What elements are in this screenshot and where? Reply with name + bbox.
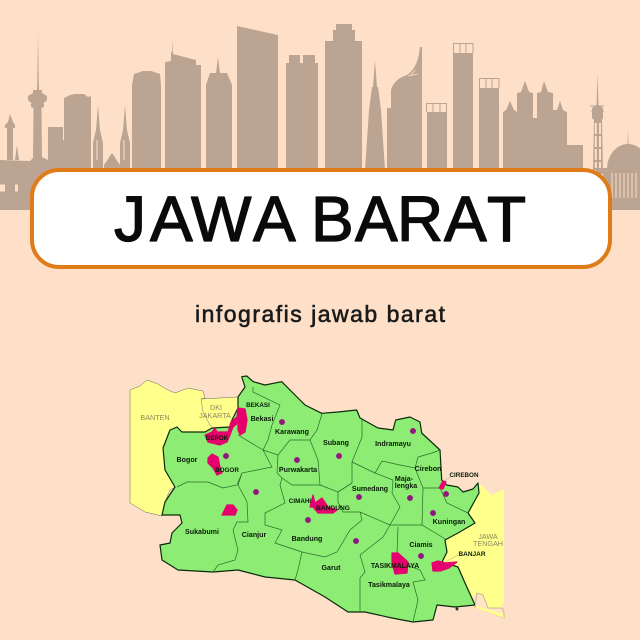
- cities in magenta: [205, 408, 457, 574]
- regency capitals: [223, 419, 449, 559]
- district labels: Karawang: [275, 428, 309, 436]
- grey province labels: JAWA: [478, 532, 498, 541]
- district labels: CIMAHI: [289, 498, 311, 505]
- district labels: TASIKMALAYA: [371, 563, 419, 570]
- neighbouring province: Banten: [130, 380, 238, 516]
- district labels: Bekasi: [251, 415, 273, 423]
- title text: JAWA BARAT: [114, 183, 526, 255]
- district labels: Bandung: [292, 535, 322, 543]
- district boundaries: [177, 387, 468, 622]
- island yellow strip: [476, 606, 504, 618]
- south coast island: [475, 593, 504, 618]
- district labels: Sumedang: [352, 485, 388, 493]
- district labels: Maja-: [395, 475, 414, 483]
- grey province labels: JAKARTA: [199, 411, 231, 420]
- grey province labels: [140, 403, 503, 548]
- label leader lines: [443, 477, 458, 562]
- DKI Jakarta boundary: [201, 399, 212, 428]
- district labels: [177, 402, 486, 589]
- district labels: CIREBON: [449, 472, 479, 479]
- coastal marker: [456, 608, 458, 610]
- district labels: BOGOR: [215, 467, 239, 474]
- district labels: BANDUNG: [316, 505, 350, 512]
- skyline details: [0, 44, 636, 198]
- title banner: [32, 170, 610, 267]
- map of West Java: [130, 376, 504, 622]
- district labels: Indramayu: [375, 440, 411, 448]
- district labels: Cianjur: [242, 531, 266, 539]
- grey province labels: TENGAH: [473, 539, 503, 548]
- district labels: Subang: [323, 439, 349, 447]
- district labels: BEKASI: [246, 402, 270, 409]
- district labels: Purwakarta: [279, 466, 317, 474]
- district labels: Cirebon: [415, 465, 441, 473]
- neighbouring province: Jawa Tengah: [442, 483, 504, 608]
- grey province labels: BANTEN: [140, 413, 170, 422]
- district labels: Kuningan: [433, 518, 465, 526]
- subtitle: infografis jawab barat: [195, 301, 446, 327]
- province outline: Jawa Barat: [160, 376, 479, 622]
- district labels: lengka: [395, 482, 417, 490]
- grey province labels: DKI: [210, 403, 222, 412]
- district labels: DEPOK: [206, 435, 229, 442]
- district labels: Sukabumi: [185, 528, 219, 536]
- district labels: Garut: [322, 564, 341, 572]
- district labels: Tasikmalaya: [368, 581, 410, 589]
- district labels: BANJAR: [458, 551, 486, 558]
- district labels: Ciamis: [409, 541, 433, 549]
- city skyline: [0, 24, 640, 210]
- district labels: Bogor: [177, 456, 198, 464]
